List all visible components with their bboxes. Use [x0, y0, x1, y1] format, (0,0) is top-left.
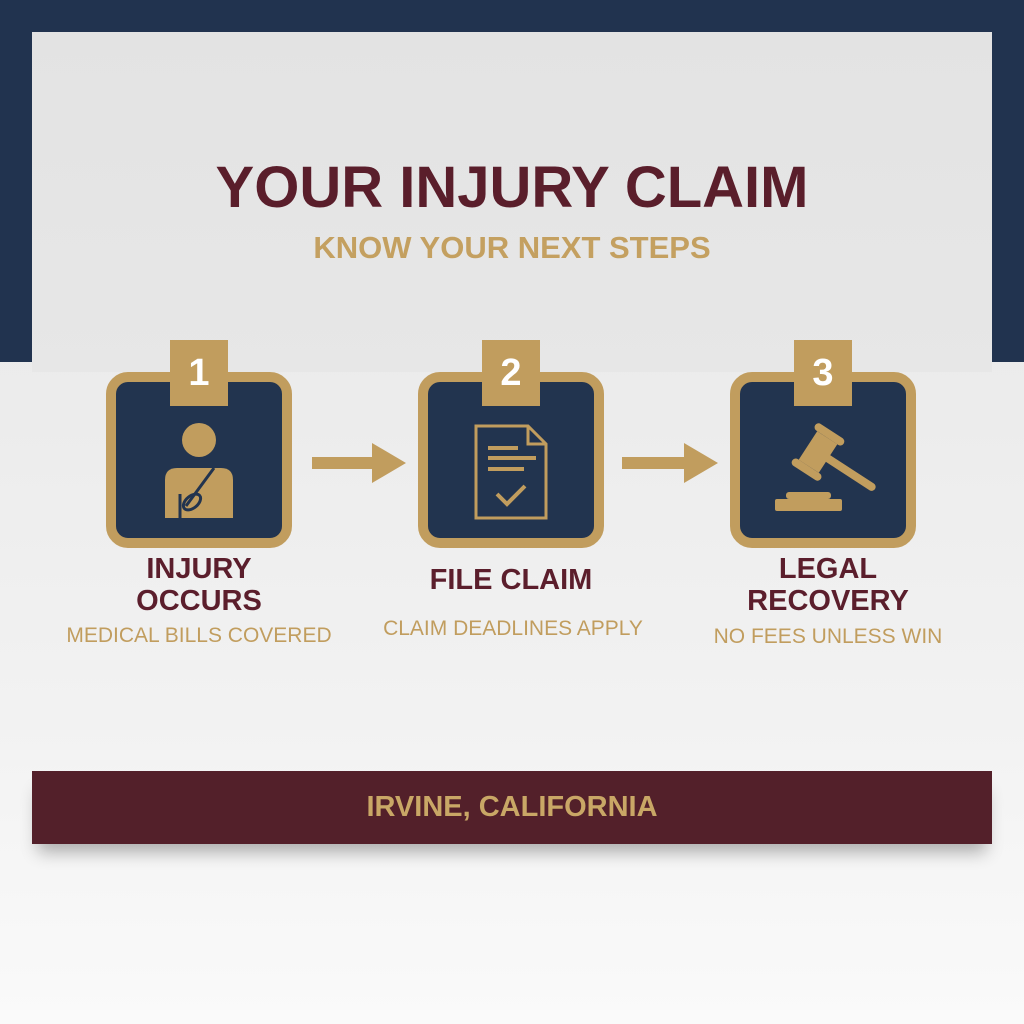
- step 1 number: 1: [188, 352, 210, 394]
- arrow 1: [312, 443, 406, 483]
- step 1 heading: [136, 553, 262, 617]
- step 1 box: [106, 372, 292, 548]
- step 3 number: [794, 340, 852, 406]
- step 1 heading: INJURY: [146, 553, 252, 585]
- banner: IRVINE, CALIFORNIA: [366, 791, 658, 823]
- step 1 text: MEDICAL BILLS COVERED: [66, 624, 332, 647]
- step 2 box: [418, 372, 604, 548]
- subtitle: KNOW YOUR NEXT STEPS: [313, 230, 711, 265]
- banner: [32, 771, 992, 844]
- navy frame: [0, 0, 1024, 362]
- step 3 text: NO FEES UNLESS WIN: [714, 625, 942, 648]
- step 1 number: [170, 340, 228, 406]
- icon: gavel: [775, 423, 876, 511]
- step 3 box: [730, 372, 916, 548]
- step 2 heading: FILE CLAIM: [430, 564, 592, 596]
- icon: injured person: [165, 423, 233, 518]
- step 2 text: CLAIM DEADLINES APPLY: [383, 617, 643, 640]
- arrow 2: [622, 443, 718, 483]
- step 3 number: 3: [812, 352, 834, 394]
- step 1 heading: OCCURS: [136, 585, 262, 617]
- step 3 heading: LEGAL: [779, 553, 877, 585]
- step 2 number: 2: [500, 352, 522, 394]
- title: YOUR INJURY CLAIM: [216, 155, 808, 220]
- step 2 number: [482, 340, 540, 406]
- icon: document: [474, 424, 548, 520]
- step 3 heading: [747, 553, 909, 617]
- step 3 heading: RECOVERY: [747, 585, 909, 617]
